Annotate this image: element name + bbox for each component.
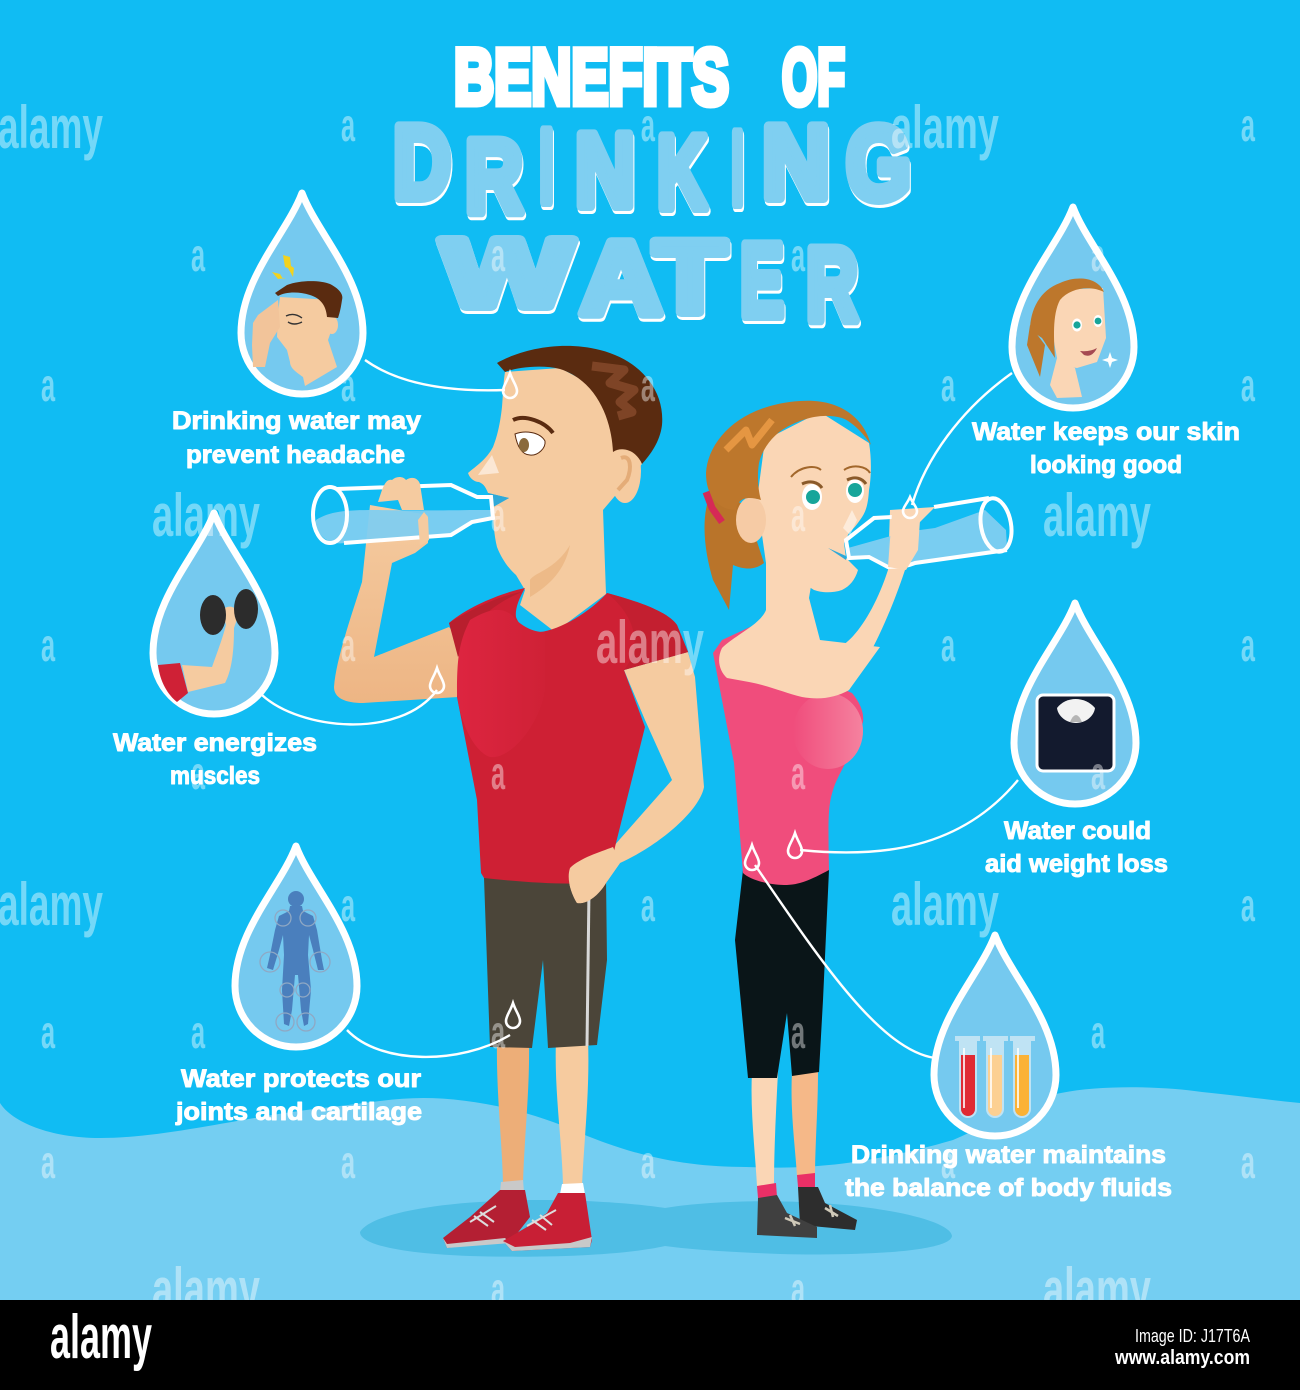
drop: muscles — [153, 513, 275, 714]
man hand-on-hip arm — [569, 652, 704, 903]
woman hand on bottle — [888, 507, 935, 570]
watermark marks: a — [1241, 1136, 1255, 1188]
watermark logos: alamy — [0, 871, 103, 938]
woman raised arm — [800, 507, 935, 694]
dumbbell icon — [200, 589, 258, 635]
watermark marks: a — [191, 229, 205, 281]
watermark marks: a — [791, 1263, 805, 1315]
watermark logos: alamy — [596, 609, 704, 676]
watermark marks: a — [791, 229, 805, 281]
watermark marks: a — [41, 359, 55, 411]
man hair — [497, 346, 662, 464]
test tubes icon — [955, 1036, 1035, 1118]
watermark marks: a — [791, 1006, 805, 1058]
caption: fluids — [845, 1141, 1172, 1202]
woman shoes — [757, 1187, 857, 1238]
headache head icon — [277, 297, 337, 386]
caption: headache — [172, 407, 421, 469]
woman eyes — [791, 466, 870, 510]
caption: headache: Drinking water may — [172, 407, 421, 435]
woman neck and shoulder — [719, 555, 880, 698]
title: water: R — [806, 227, 858, 343]
man shorts — [484, 878, 607, 1048]
title: drinking: I — [731, 111, 744, 227]
caption: joints — [175, 1065, 422, 1126]
watermark marks: a — [491, 229, 505, 281]
title: water: T — [654, 220, 726, 334]
watermark logos: alamy — [152, 482, 260, 549]
caption: headache: prevent headache — [186, 441, 405, 469]
watermark logos: alamy — [1043, 482, 1151, 549]
watermark marks: a — [1091, 229, 1105, 281]
drop: joints — [235, 846, 357, 1047]
watermark logos: alamy — [1043, 1256, 1151, 1323]
man neck and head — [468, 368, 642, 632]
watermark marks: a — [941, 359, 955, 411]
watermark logos: alamy — [0, 94, 103, 161]
watermark marks: a — [341, 619, 355, 671]
title: drinking: G — [846, 106, 911, 222]
watermark marks: a — [1091, 747, 1105, 799]
watermark logos: alamy — [152, 1256, 260, 1323]
man raised arm — [334, 505, 460, 703]
watermark marks: a — [791, 747, 805, 799]
man eye — [513, 418, 553, 455]
watermark marks: a — [491, 747, 505, 799]
caption: muscles: muscles — [170, 762, 260, 790]
drop: weight — [1014, 603, 1136, 804]
footer url: www.alamy.com — [1114, 1347, 1250, 1369]
title: water: A — [580, 221, 662, 337]
watermark logos — [0, 94, 1151, 1323]
title: drinking — [393, 105, 911, 235]
man mouth water — [488, 493, 509, 507]
footer image id: Image ID: J17T6A — [1135, 1326, 1250, 1346]
man bottle — [313, 485, 493, 543]
caption: fluids: the balance of body fluids — [845, 1174, 1172, 1202]
woman ear — [736, 497, 766, 543]
watermark marks: a — [1241, 359, 1255, 411]
man legs — [497, 1040, 529, 1184]
watermark marks: a — [641, 99, 655, 151]
title: benefits of: BENEFITS — [454, 32, 729, 121]
title: water: W — [442, 220, 573, 327]
scale icon — [1037, 695, 1114, 771]
caption: weight — [985, 817, 1168, 878]
drop: fluids — [934, 935, 1056, 1136]
watermark marks: a — [941, 619, 955, 671]
drop: skin — [1012, 207, 1134, 408]
watermark marks: a — [341, 359, 355, 411]
woman top — [713, 627, 863, 885]
woman bottle — [846, 496, 1015, 567]
watermark marks: a — [641, 879, 655, 931]
woman hair tie — [706, 492, 722, 522]
ground wave — [0, 1087, 1300, 1300]
watermark marks: a — [341, 99, 355, 151]
title: water: E — [740, 223, 784, 339]
woman ponytail — [705, 490, 764, 610]
footer logo: alamy — [50, 1303, 152, 1372]
man hand over shorts — [569, 847, 620, 903]
title: benefits of: OF — [782, 32, 845, 121]
watermark marks: a — [491, 1006, 505, 1058]
watermark marks: a — [1241, 99, 1255, 151]
caption: joints: Water protects our — [181, 1065, 421, 1093]
watermark marks: a — [941, 1136, 955, 1188]
watermark marks: a — [341, 879, 355, 931]
man socks — [500, 1180, 524, 1192]
caption: skin: Water keeps our skin — [972, 418, 1240, 446]
watermark marks: a — [491, 489, 505, 541]
figure: woman drinking — [705, 401, 1015, 1238]
watermark marks: a — [641, 359, 655, 411]
caption: muscles: Water energizes — [113, 729, 317, 757]
woman leggings — [735, 870, 829, 1078]
title: drinking: I — [539, 109, 554, 225]
watermark marks: a — [491, 1263, 505, 1315]
watermark marks: a — [1091, 1006, 1105, 1058]
man ear — [609, 439, 641, 503]
connector lines — [262, 360, 1018, 1058]
title: drinking: R — [465, 119, 523, 235]
watermark marks: a — [1241, 879, 1255, 931]
woman hair — [706, 401, 871, 510]
man shirt — [449, 588, 688, 884]
title: water — [442, 220, 858, 343]
caption: muscles — [113, 729, 317, 790]
caption: skin — [972, 418, 1240, 479]
caption: weight: aid weight loss — [985, 850, 1168, 878]
ground shadow — [360, 1200, 952, 1257]
watermark marks: a — [191, 747, 205, 799]
man shoes — [443, 1190, 592, 1251]
watermark marks: a — [41, 619, 55, 671]
caption: joints: joints and cartilage — [175, 1098, 422, 1126]
woman legs — [752, 1072, 778, 1186]
title: drinking: N — [762, 105, 830, 221]
watermark marks: a — [341, 1136, 355, 1188]
arm icon — [182, 607, 238, 692]
caption: skin: looking good — [1030, 451, 1182, 479]
watermark marks: a — [191, 1006, 205, 1058]
caption: fluids: Drinking water maintains — [851, 1141, 1166, 1169]
woman mouth water — [828, 548, 846, 560]
footer bar — [0, 1300, 1300, 1390]
watermark logos: alamy — [891, 871, 999, 938]
watermark marks: a — [791, 489, 805, 541]
watermark marks: a — [1241, 619, 1255, 671]
title: drinking: N — [575, 113, 635, 229]
watermark marks: a — [641, 1136, 655, 1188]
watermark logos: alamy — [891, 94, 999, 161]
man fingers — [378, 477, 424, 510]
caption: weight: Water could — [1004, 817, 1151, 845]
small drop markers on body — [430, 373, 917, 1028]
watermark marks: a — [41, 1136, 55, 1188]
woman socks — [757, 1183, 777, 1198]
figure: man drinking — [313, 346, 704, 1251]
woman face icon — [1027, 279, 1118, 398]
body icon — [260, 891, 330, 1031]
watermark marks: a — [41, 1006, 55, 1058]
title: drinking: K — [657, 115, 707, 231]
woman face — [757, 412, 871, 592]
drop: headache — [241, 193, 363, 394]
title: drinking: D — [393, 105, 451, 221]
lightning icon — [272, 255, 294, 279]
